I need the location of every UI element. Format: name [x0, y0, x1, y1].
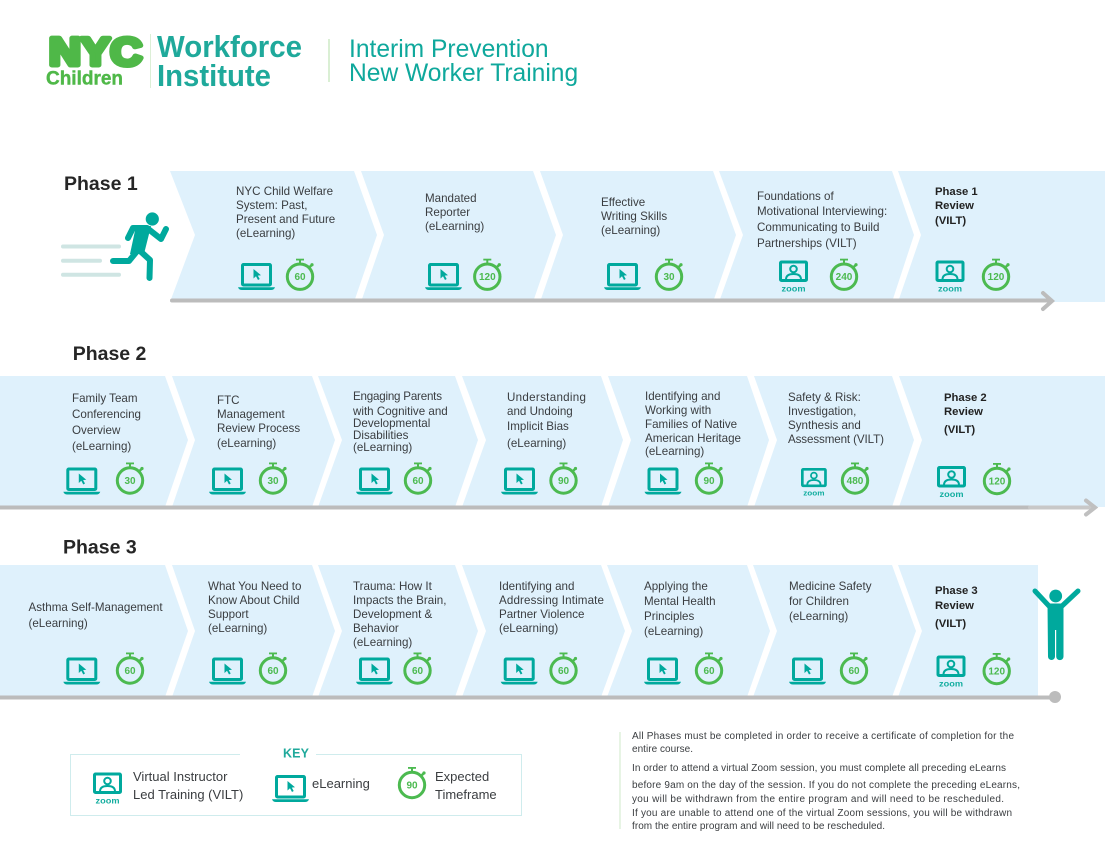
logo: Workforce Institute: Institute: [157, 58, 271, 93]
panel: key legend: [70, 746, 522, 816]
text: course title: Partner Violence: [499, 608, 585, 621]
icon: timer 60: 60: [703, 666, 715, 677]
text: course title: Communicating to Build: [757, 221, 879, 234]
icon: zoom: [937, 262, 963, 294]
icon: runner: [63, 212, 166, 278]
text: course title: Principles: [644, 610, 694, 623]
icon: timer 480: [842, 462, 869, 493]
icon: timer 90: 90: [406, 780, 418, 792]
title: New Worker Training: [349, 60, 578, 87]
text: course title: Engaging Parents: [353, 390, 442, 403]
icon: zoom: zoom: [939, 678, 963, 688]
text: course title: Family Team: [72, 392, 138, 405]
line: Phase 3 timeline with end dot: [0, 691, 1061, 703]
icon: timer 30: 30: [663, 272, 675, 283]
icon: zoom: [780, 262, 806, 294]
icon: timer 60: 60: [412, 476, 424, 487]
panel: Mandated Reporter: [361, 171, 556, 302]
panel: FTC Management Review Process: [172, 376, 335, 507]
icon: timer 240: [831, 259, 858, 289]
text: course title: (eLearning): [644, 625, 703, 638]
logo: Workforce Institute: Workforce: [157, 29, 302, 64]
text: course title: (eLearning): [353, 636, 412, 649]
icon: timer 60: 60: [294, 272, 306, 283]
icon: timer 60: [405, 462, 432, 493]
text: course title: Medicine Safety: [789, 580, 872, 593]
logo: NYC Children: Children: [46, 68, 123, 90]
text: course title: Working with: [645, 404, 711, 417]
text: course title: Conferencing: [72, 408, 141, 421]
icon: laptop: [63, 469, 100, 494]
icon: person with raised arms: [1035, 590, 1078, 660]
text: eLearning label: eLearning: [312, 776, 370, 791]
text: review title: Review: [935, 600, 974, 612]
text: course title: Review Process: [217, 422, 300, 435]
text: course title: Partnerships (VILT): [757, 237, 857, 250]
icon: timer 60: 60: [558, 666, 569, 677]
text: course title: Assessment (VILT): [788, 433, 884, 446]
heading: Phase 3: Phase 3: [63, 536, 137, 558]
text: course title: Synthesis and: [788, 419, 861, 432]
icon: zoom: zoom: [940, 489, 964, 499]
text: course title: and Undoing: [507, 405, 573, 418]
panel: Engaging Parents: [318, 376, 478, 507]
icon: timer 120: 120: [479, 272, 496, 283]
header logo: [46, 29, 330, 93]
text: review title: Phase 3: [935, 585, 978, 597]
icon: zoom: zoom: [782, 284, 806, 294]
panel: Foundations of Motivational Interviewing: [719, 171, 914, 302]
text: course title: (eLearning): [208, 622, 267, 635]
text: course title: Identifying and: [499, 580, 574, 593]
text: course title: Management: [217, 408, 285, 421]
panel: Families of Native American Heritage: [608, 376, 769, 507]
text: review title: Phase 2: [944, 392, 987, 404]
text: review title: (VILT): [935, 618, 966, 630]
icon: timer 60: [260, 652, 287, 683]
arrow: Phase 2 timeline: [0, 500, 1095, 514]
icon: timer 60: [551, 652, 577, 683]
text: course title: Know About Child: [208, 594, 300, 607]
icon: timer 30: [117, 462, 144, 493]
panel: Phase 2 Review: [899, 376, 1105, 507]
icon: laptop: [63, 659, 100, 684]
icon: zoom: zoom: [938, 284, 962, 294]
text: course title: (eLearning): [425, 220, 484, 233]
icon: timer 60: [841, 652, 868, 683]
panel: Phase 1 Review: [898, 171, 1105, 302]
text: course title: Families of Native: [645, 418, 737, 431]
icon: laptop: [644, 659, 681, 684]
icon: timer 90: 90: [703, 476, 715, 487]
text: review title: (VILT): [944, 424, 975, 436]
text block: completion notes: All Phases must be completed in order to receive a certificate of completion for the: [632, 731, 1014, 742]
text: course title: (eLearning): [601, 224, 660, 237]
icon: timer 90: [551, 462, 577, 493]
text: course title: (eLearning): [236, 227, 295, 240]
icon: timer 480: 480: [847, 476, 864, 487]
text: course title: Trauma: How It: [353, 580, 433, 593]
text: course title: Implicit Bias: [507, 420, 569, 433]
text: review title: Review: [935, 200, 974, 212]
icon: zoom: zoom: [803, 489, 825, 498]
text: VILT label: Led Training (VILT): [133, 787, 243, 802]
text block: completion notes: If you are unable to attend one of the virtual Zoom sessions, you will be withdrawn: [632, 808, 1012, 819]
icon: laptop: [209, 659, 246, 684]
icon: timer 60: [117, 652, 144, 683]
heading: key: KEY: [283, 746, 310, 760]
text: course title: (eLearning): [217, 437, 276, 450]
text: course title: Asthma Self-Management: [28, 601, 163, 614]
icon: timer 120: 120: [989, 476, 1006, 488]
text: course title: Understanding: [507, 391, 586, 404]
panel: Medicine Safety: [753, 565, 916, 697]
text: review title: (VILT): [935, 215, 966, 227]
text: course title: Developmental: [353, 417, 430, 430]
text: course title: Motivational Interviewing:: [757, 205, 887, 218]
icon: laptop: [209, 469, 246, 494]
arrow: Phase 1 timeline: [172, 293, 1052, 309]
text block: completion notes: from the entire program and will need to be rescheduled.: [632, 821, 885, 832]
icon: laptop: [604, 264, 641, 290]
icon: timer 30: 30: [124, 476, 136, 487]
text: course title: NYC Child Welfare: [236, 185, 333, 198]
icon: timer 90: 90: [558, 476, 569, 487]
text: course title: Foundations of: [757, 190, 834, 203]
icon: laptop: [238, 264, 275, 290]
icon: laptop: [501, 659, 538, 684]
text: course title: Impacts the Brain,: [353, 594, 446, 607]
icon: timer 120: 120: [988, 666, 1005, 678]
icon: timer 90: [399, 767, 426, 798]
icon: timer 30: [656, 259, 683, 289]
text: course title: (eLearning): [507, 437, 566, 450]
text: course title: Effective: [601, 196, 645, 209]
icon: timer 120: 120: [988, 272, 1005, 283]
text: course title: Reporter: [425, 206, 470, 219]
panel: Asthma Self-Management: [0, 565, 188, 697]
icon: timer 60: 60: [267, 666, 279, 677]
icon: timer 60: [405, 652, 431, 683]
text: course title: (eLearning): [499, 622, 558, 635]
icon: timer 30: 30: [267, 476, 279, 487]
title: Interim Prevention: [349, 36, 549, 63]
text: expected timeframe label: Expected: [435, 769, 489, 784]
panel: Family Team Conferencing Overview: [0, 376, 188, 507]
text: course title: Support: [208, 608, 249, 621]
panel: Trauma: [318, 565, 478, 697]
panel: Intimate Partner Violence: [462, 565, 625, 697]
text: course title: (eLearning): [645, 445, 704, 458]
text: course title: Present and Future: [236, 213, 335, 226]
icon: laptop: [356, 659, 393, 684]
icon: timer 60: [696, 652, 723, 683]
icon: timer 120: [475, 259, 501, 289]
logo: Workforce Institute: [157, 29, 302, 93]
panel: Mental Health Principles: [607, 565, 770, 697]
icon: laptop: [272, 776, 309, 802]
icon: laptop: [789, 659, 826, 684]
text: course title: Identifying and: [645, 390, 720, 403]
icon: timer 90: [696, 462, 723, 493]
text: course title: (eLearning): [28, 617, 88, 630]
logo: NYC Children: NYC: [49, 31, 142, 74]
text: course title: What You Need to: [208, 580, 301, 593]
text: course title: (eLearning): [789, 610, 848, 623]
panel: Effective Writing Skills: [540, 171, 736, 302]
text: expected timeframe label: Timeframe: [435, 787, 497, 802]
panel: Phase 2 row: [0, 376, 1105, 507]
text: course title: Addressing Intimate: [499, 594, 604, 607]
icon: zoom: [802, 469, 825, 498]
text: course title: System: Past,: [236, 199, 308, 212]
text: course title: with Cognitive and: [352, 405, 448, 418]
heading: Phase 1: Phase 1: [64, 173, 138, 195]
text: course title: (eLearning): [353, 441, 412, 454]
text: course title: Mental Health: [644, 595, 716, 608]
icon: laptop: [501, 469, 538, 494]
panel: NYC Child Welfare System: [170, 171, 377, 302]
icon: laptop: [356, 469, 393, 494]
text: VILT label: Virtual Instructor: [133, 769, 228, 784]
text: course title: (eLearning): [72, 440, 131, 453]
panel: Safety and Risk: [754, 376, 914, 507]
text block: completion notes: entire course.: [632, 744, 693, 755]
text: course title: Behavior: [353, 622, 399, 635]
icon: timer 60: [287, 259, 314, 289]
logo: NYC Children: [46, 31, 142, 90]
panel: Phase 3 Review: [898, 565, 1038, 697]
panel: Child Support: [172, 565, 335, 697]
icon: laptop: [644, 469, 682, 494]
text: course title: Writing Skills: [601, 210, 667, 223]
icon: zoom: zoom: [96, 796, 120, 806]
text: course title: Overview: [72, 424, 121, 437]
text block: completion notes: In order to attend a virtual Zoom session, you must complete all preceding eLearns: [632, 763, 1006, 774]
text: course title: Disabilities: [353, 429, 409, 442]
icon: zoom: [94, 774, 120, 806]
icon: laptop: [425, 264, 462, 290]
text: course title: Investigation,: [788, 405, 856, 418]
panel: Phase 1 row: [170, 171, 1105, 302]
heading: Phase 2: Phase 2: [73, 343, 147, 365]
icon: timer 240: 240: [836, 272, 853, 283]
icon: timer 120: [984, 463, 1011, 494]
text: course title: for Children: [789, 595, 849, 608]
icon: timer 120: [983, 259, 1010, 289]
icon: timer 30: [260, 462, 287, 493]
text: course title: American Heritage: [645, 432, 741, 445]
text: course title: Development &: [353, 608, 433, 621]
text: review title: Phase 1: [935, 186, 978, 198]
icon: timer 60: 60: [848, 666, 860, 677]
icon: zoom: [938, 468, 964, 499]
panel: Phase 3 row: [0, 565, 1038, 697]
text block: completion notes: you will be withdrawn from the entire program and will need to be rescheduled.: [632, 794, 1004, 805]
text: course title: Mandated: [425, 192, 477, 205]
text: course title: Safety & Risk:: [788, 391, 861, 404]
icon: timer 60: 60: [124, 666, 136, 677]
text block: completion notes: before 9am on the day of the session. If you do not complete the preceding eLearns,: [632, 780, 1020, 791]
panel: Understanding and Undoing Implicit Bias: [462, 376, 623, 507]
icon: timer 60: 60: [412, 666, 423, 677]
text: course title: FTC: [217, 394, 240, 407]
text: course title: Applying the: [644, 580, 708, 593]
text: review title: Review: [944, 406, 983, 418]
